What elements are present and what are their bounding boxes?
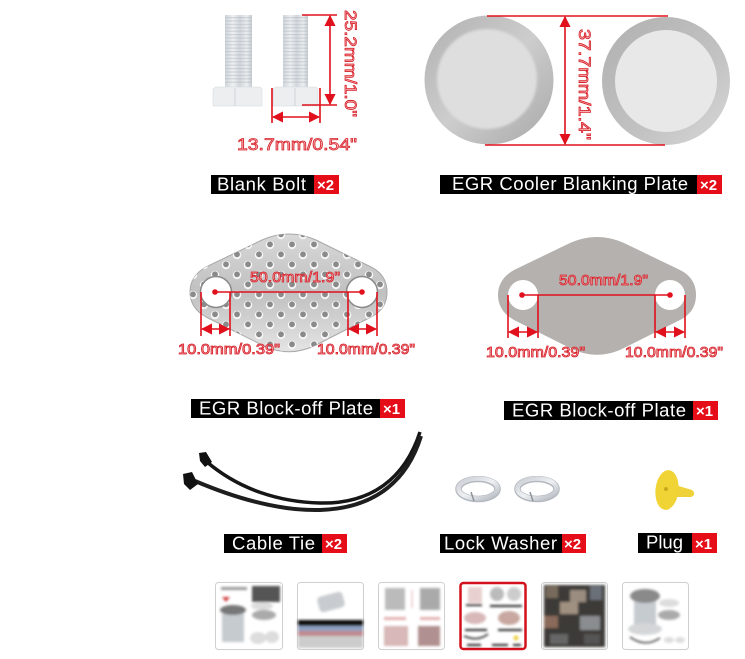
label: Plug x1: ×1 <box>695 536 712 553</box>
label: Cable Tie x2 <box>224 532 347 554</box>
dimension: bolt head width: 13.7mm/0.54" <box>237 135 357 154</box>
thumbnail 1 <box>216 582 282 650</box>
dimension: right hole width <box>317 292 415 358</box>
dimension: hole spacing: 50.0mm/1.9" <box>250 269 340 286</box>
panel: plug <box>638 469 717 553</box>
panel: perforated EGR block-off plate <box>178 234 415 418</box>
dimension: left hole width: 10.0mm/0.39" <box>486 345 585 361</box>
dimension: left hole width <box>178 292 280 358</box>
label: EGR Block-off Plate x1: EGR Block-off Plate <box>199 398 373 418</box>
label: EGR Cooler Blanking Plate x2: ×2 <box>700 177 717 194</box>
dimension: left hole width <box>486 295 585 361</box>
label: Plug x1: Plug <box>646 532 683 552</box>
label: EGR Block-off Plate x1: ×1 <box>696 403 713 420</box>
dimension: right hole width: 10.0mm/0.39" <box>625 345 723 361</box>
dimension: plate diameter <box>485 16 668 145</box>
thumbnail 5 <box>542 582 608 650</box>
label: Lock Washer x2: ×2 <box>564 536 581 553</box>
label: Cable Tie x2: ×2 <box>325 536 342 553</box>
label: Blank Bolt x2 <box>211 174 339 194</box>
thumbnail 2 <box>298 582 364 650</box>
icon: perforated plate <box>190 234 387 352</box>
label: Cable Tie x2: Cable Tie <box>232 532 315 554</box>
icon: plain plate <box>498 237 696 355</box>
thumbnail 4 (selected) <box>460 583 526 649</box>
icon: smooth round plate <box>602 17 730 145</box>
label: Blank Bolt x2: ×2 <box>317 177 334 194</box>
icon: two bolts <box>213 15 318 106</box>
label: EGR Block-off Plate x1: EGR Block-off Plate <box>512 400 686 420</box>
panel: EGR cooler blanking plate <box>424 16 730 194</box>
thumbnail 6 <box>622 582 688 650</box>
thumbnail strip <box>216 582 688 650</box>
icon: textured round plate <box>424 16 554 144</box>
panel: lock washer <box>440 478 586 554</box>
label: Blank Bolt x2: Blank Bolt <box>217 174 306 194</box>
dimension: bolt head width <box>237 88 357 154</box>
panel: cable tie <box>183 432 421 554</box>
dimension: hole spacing <box>212 269 365 295</box>
label: Plug x1 <box>638 532 717 553</box>
label: EGR Cooler Blanking Plate x2: EGR Cooler Blanking Plate <box>452 173 688 194</box>
dimension: bolt length <box>302 10 360 117</box>
dimension: left hole width: 10.0mm/0.39" <box>178 342 280 358</box>
dimension: bolt length: 25.2mm/1.0" <box>341 10 360 117</box>
thumbnail 3 <box>378 582 444 650</box>
dimension: hole spacing <box>519 272 673 298</box>
icon: two cable ties <box>183 432 421 510</box>
dimension: right hole width <box>625 295 723 361</box>
panel: blank bolt <box>211 10 360 194</box>
dimension: hole spacing: 50.0mm/1.9" <box>559 272 648 289</box>
icon: yellow plug <box>653 469 694 511</box>
icon: two lock washers <box>458 478 556 501</box>
label: EGR Block-off Plate x1: ×1 <box>383 401 400 418</box>
label: Lock Washer x2: Lock Washer <box>444 532 557 554</box>
panel: plain EGR block-off plate <box>486 237 723 420</box>
dimension: right hole width: 10.0mm/0.39" <box>317 342 415 358</box>
dimension: plate diameter: 37.7mm/1.4" <box>575 29 594 140</box>
